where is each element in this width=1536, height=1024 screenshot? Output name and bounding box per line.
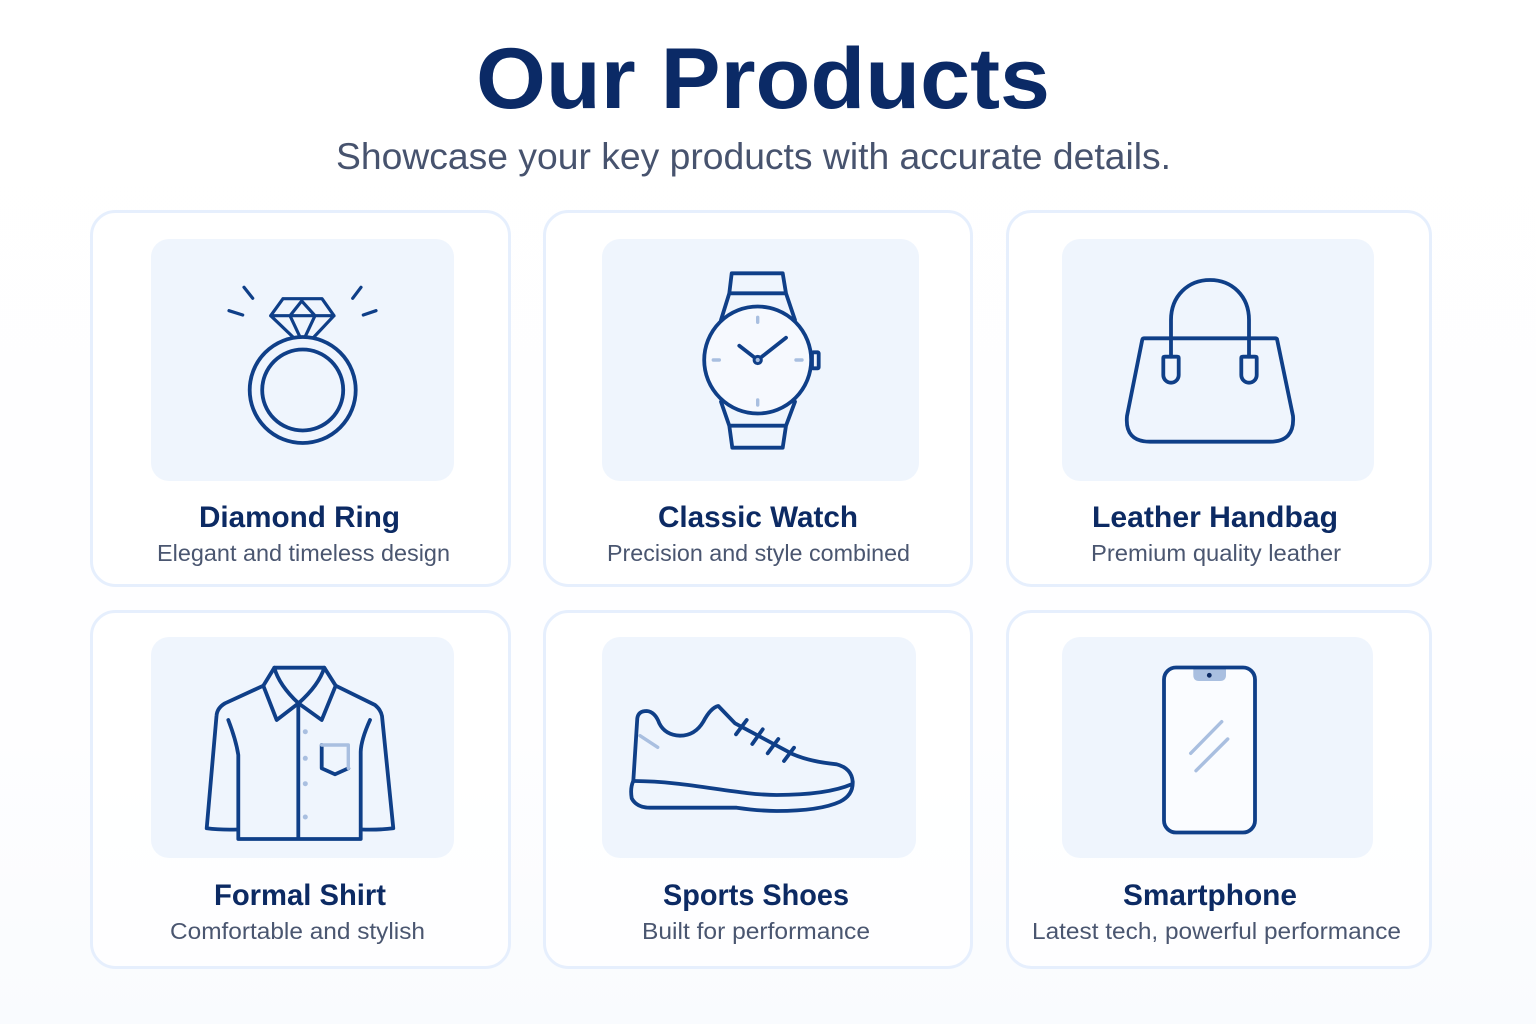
icon: smartphone bbox=[1164, 668, 1255, 832]
product description: Precision and style combined bbox=[607, 540, 910, 566]
product description: Built for performance bbox=[642, 918, 870, 944]
product description: Elegant and timeless design bbox=[157, 540, 450, 566]
title: Our Products bbox=[476, 31, 1050, 127]
image tile: leather handbag bbox=[1062, 239, 1374, 481]
image tile: formal shirt bbox=[151, 637, 454, 858]
panel: diamond ring bbox=[92, 212, 510, 586]
product name: Sports Shoes bbox=[663, 879, 849, 912]
icon: leather handbag bbox=[1127, 280, 1293, 442]
image tile: smartphone bbox=[1062, 637, 1373, 858]
image tile: classic watch bbox=[602, 239, 919, 481]
image tile: diamond ring bbox=[151, 239, 454, 481]
product name: Smartphone bbox=[1123, 879, 1297, 912]
panel: smartphone bbox=[1008, 612, 1430, 968]
product description: Latest tech, powerful performance bbox=[1032, 918, 1401, 944]
panel: formal shirt bbox=[92, 612, 510, 968]
subtitle: Showcase your key products with accurate details. bbox=[336, 136, 1171, 177]
panel: sports shoes bbox=[544, 612, 972, 968]
panel: classic watch bbox=[544, 212, 972, 586]
image tile: sports shoes bbox=[602, 637, 916, 858]
icon: diamond ring bbox=[229, 287, 376, 443]
product name: Leather Handbag bbox=[1092, 501, 1338, 534]
panel: leather handbag bbox=[1008, 212, 1430, 586]
icon: classic watch bbox=[704, 273, 819, 448]
icon: sports shoes bbox=[631, 706, 853, 811]
product description: Premium quality leather bbox=[1091, 540, 1341, 566]
icon: formal shirt bbox=[207, 668, 393, 839]
product name: Formal Shirt bbox=[214, 879, 386, 912]
product name: Diamond Ring bbox=[199, 501, 400, 534]
product description: Comfortable and stylish bbox=[170, 918, 425, 944]
product name: Classic Watch bbox=[658, 501, 858, 534]
